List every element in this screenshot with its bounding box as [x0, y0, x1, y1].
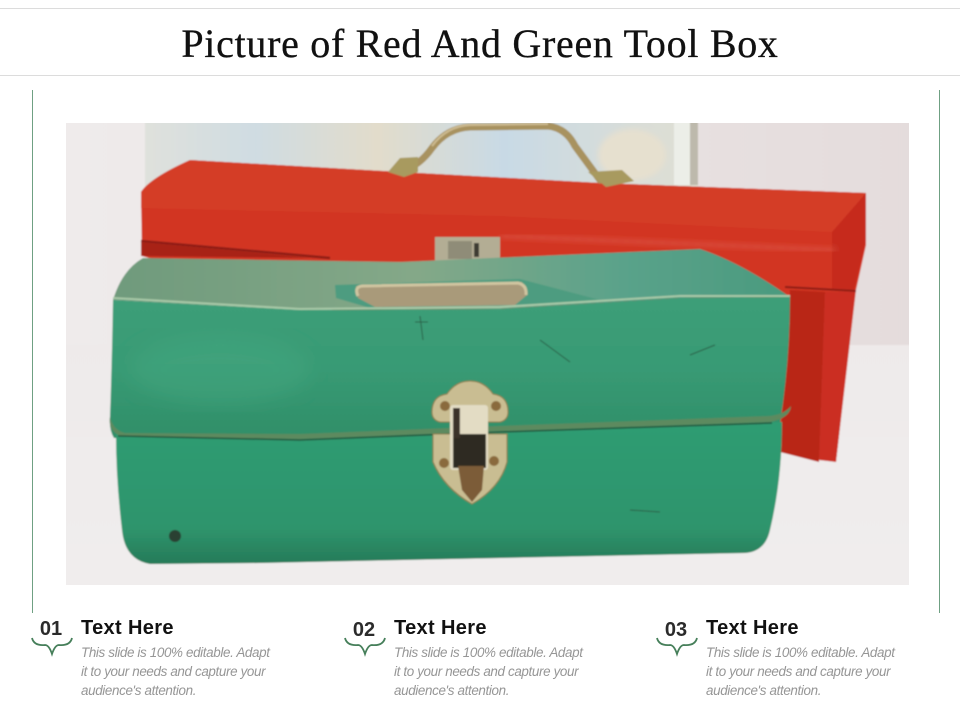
description 03: it to your needs and capture your	[706, 664, 890, 679]
description 01	[81, 645, 270, 698]
number 03: 03	[665, 619, 687, 641]
table	[60, 345, 915, 590]
map on the wall	[145, 117, 698, 188]
description 02: it to your needs and capture your	[394, 664, 578, 679]
red box clasp	[435, 237, 500, 261]
number 02: 02	[353, 619, 375, 641]
wall	[60, 117, 915, 587]
scratches	[415, 316, 715, 512]
description 02: This slide is 100% editable. Adapt	[394, 645, 583, 660]
description 02	[394, 645, 584, 698]
lid top	[113, 249, 790, 310]
top handle plate	[356, 282, 527, 307]
title: Picture of Red And Green Tool Box	[181, 21, 779, 66]
latch	[432, 381, 508, 504]
lid front	[110, 297, 790, 440]
heading 03: Text Here	[706, 617, 799, 639]
header rules	[0, 8, 960, 76]
item 02	[344, 617, 584, 698]
heading 01: Text Here	[81, 617, 174, 639]
red box handle	[388, 124, 634, 187]
description 03	[706, 645, 896, 698]
chevron icon 01	[31, 638, 73, 657]
description 03: audience's attention.	[706, 683, 821, 698]
rim	[110, 406, 791, 439]
photo: red and green tool boxes	[66, 123, 909, 585]
description 03: This slide is 100% editable. Adapt	[706, 645, 895, 660]
lower body	[116, 422, 782, 564]
red tool box	[141, 160, 866, 462]
description 02: audience's attention.	[394, 683, 509, 698]
right green frame line	[939, 90, 940, 613]
left green frame line	[32, 90, 33, 613]
chevron icon 02	[344, 638, 386, 657]
item 01	[31, 617, 270, 698]
description 01: audience's attention.	[81, 683, 196, 698]
heading 02: Text Here	[394, 617, 487, 639]
chevron icon 03	[656, 638, 698, 657]
description 01: it to your needs and capture your	[81, 664, 265, 679]
item 03	[656, 617, 896, 698]
number 01: 01	[40, 618, 62, 640]
description 01: This slide is 100% editable. Adapt	[81, 645, 270, 660]
green tool box	[110, 249, 791, 564]
